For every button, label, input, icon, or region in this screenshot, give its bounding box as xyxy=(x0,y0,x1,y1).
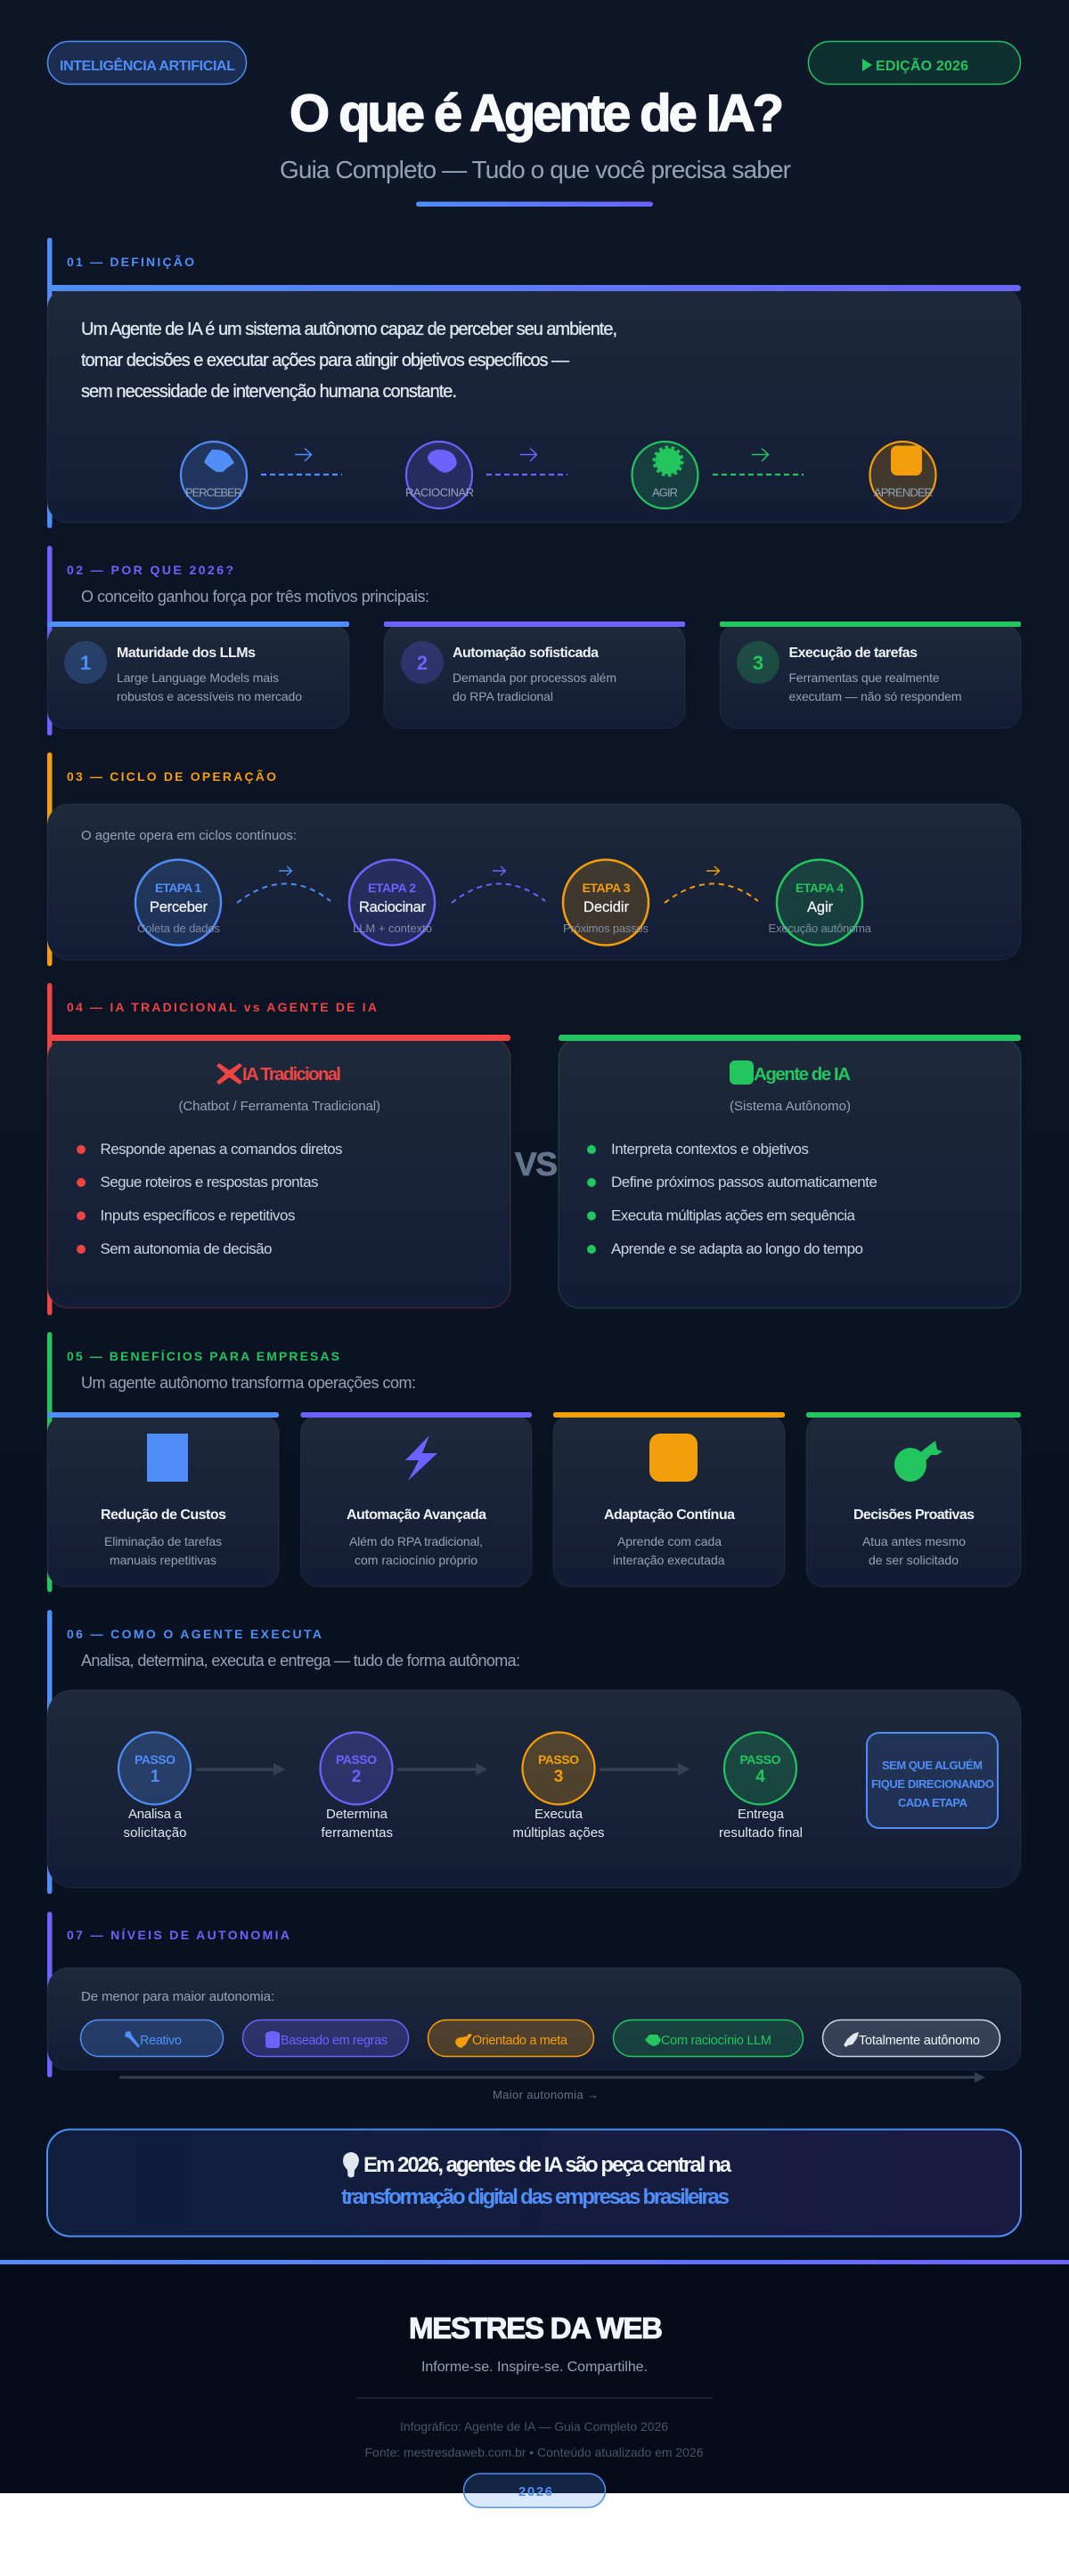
panel: ia tradicional: Segue roteiros e respostas prontas xyxy=(100,1174,319,1190)
pill: baseado em regras xyxy=(242,2019,408,2057)
step: passo 1: PASSO xyxy=(135,1752,175,1767)
step: passo 4: resultado final xyxy=(719,1825,803,1841)
arc arrow 2 xyxy=(452,866,545,903)
intro text: Um agente autônomo transforma operações com: xyxy=(81,1374,416,1392)
step 3: decidir: Próximos passos xyxy=(563,922,649,935)
arrow connector 2 xyxy=(486,449,567,475)
section label: 03 — CICLO DE OPERAÇÃO xyxy=(67,768,276,784)
step 2: raciocinar: Raciocinar xyxy=(359,899,426,915)
step 3: decidir: Decidir xyxy=(583,899,629,915)
card: maturidade dos LLMs xyxy=(47,622,349,728)
step: passo 4: 4 xyxy=(755,1767,765,1786)
section 02: por que 2026 xyxy=(47,546,1021,735)
credits line 1: Infográfico: Agente de IA — Guia Completo 2026 xyxy=(400,2419,668,2434)
step 3: decidir: ETAPA 3 xyxy=(583,881,631,895)
node: aprender: APRENDER xyxy=(874,486,933,499)
brand name: MESTRES DA WEB xyxy=(409,2312,663,2344)
card: automação avançada: Além do RPA tradicional, xyxy=(349,1534,483,1548)
badge: edição 2026: EDIÇÃO 2026 xyxy=(876,56,968,74)
node: aprender xyxy=(869,442,935,508)
step: passo 3 xyxy=(513,1733,604,1841)
callout: sem que alguém fique direcionando: CADA ETAPA xyxy=(898,1796,968,1809)
panel: agente de ia: Define próximos passos automaticamente xyxy=(611,1174,877,1190)
pill: baseado em regras: Baseado em regras xyxy=(281,2034,388,2048)
panel: agente de ia: Interpreta contextos e objetivos xyxy=(611,1141,809,1158)
vs label: VS xyxy=(515,1146,558,1182)
step: passo 2: Determina xyxy=(326,1807,388,1822)
title underline xyxy=(416,201,653,207)
card: decisões proativas: de ser solicitado xyxy=(869,1553,959,1567)
section label: 01 — DEFINIÇÃO xyxy=(67,254,194,269)
icon: light bulb xyxy=(343,2152,359,2178)
step 2: raciocinar xyxy=(349,860,435,946)
call to action banner xyxy=(47,2130,1021,2237)
intro text: O agente opera em ciclos contínuos: xyxy=(81,828,297,843)
panel: agente de ia: Agente de IA xyxy=(754,1064,851,1085)
step 1: perceber xyxy=(135,860,221,946)
panel: agente de ia: (Sistema Autônomo) xyxy=(730,1099,851,1114)
banner text line 1: Em 2026, agentes de IA são peça central na xyxy=(363,2153,732,2177)
badge: inteligência artificial xyxy=(48,41,246,84)
step: passo 1 xyxy=(118,1733,191,1841)
card: execução de tarefas: Execução de tarefas xyxy=(789,646,918,661)
step: passo 1: Analisa a xyxy=(128,1807,183,1822)
pill: com raciocínio LLM xyxy=(613,2019,804,2057)
section 06: como o agente executa xyxy=(47,1610,1021,1894)
panel: ia tradicional: IA Tradicional xyxy=(242,1064,341,1085)
step: passo 2 xyxy=(321,1733,393,1841)
card: automação sofisticada: Automação sofisticada xyxy=(453,646,599,661)
card: automação avançada: com raciocínio próprio xyxy=(355,1553,477,1567)
card: redução de custos: manuais repetitivas xyxy=(110,1553,216,1567)
intro text: O conceito ganhou força por três motivos principais: xyxy=(81,588,429,605)
banner text line 2: transformação digital das empresas brasileiras xyxy=(341,2185,730,2209)
step 4: agir: Agir xyxy=(807,899,834,915)
step: passo 2: 2 xyxy=(352,1767,361,1786)
step: passo 2: PASSO xyxy=(336,1752,377,1767)
node: perceber: PERCEBER xyxy=(185,486,242,499)
header xyxy=(48,41,1021,207)
section label: 05 — BENEFÍCIOS PARA EMPRESAS xyxy=(67,1349,339,1363)
arrow xyxy=(397,1763,487,1776)
section 01: definição xyxy=(47,238,1021,528)
section label: 04 — IA TRADICIONAL vs AGENTE DE IA xyxy=(67,1000,377,1014)
pill: totalmente autônomo xyxy=(823,2019,1000,2057)
panel: agente de ia xyxy=(559,1035,1021,1308)
card: automação sofisticada: Demanda por processos além xyxy=(453,670,616,685)
pill: com raciocínio LLM: Com raciocínio LLM xyxy=(661,2034,771,2048)
year badge xyxy=(463,2474,606,2507)
card: maturidade dos LLMs: robustos e acessíveis no mercado xyxy=(117,689,302,703)
step: passo 2: ferramentas xyxy=(321,1825,393,1841)
step: passo 4: PASSO xyxy=(739,1752,781,1767)
arrow xyxy=(600,1763,690,1776)
step: passo 4 xyxy=(719,1733,803,1841)
panel: ia tradicional xyxy=(47,1035,510,1308)
definition text: tomar decisões e executar ações para atingir objetivos específicos — xyxy=(81,351,569,370)
card: maturidade dos LLMs: Large Language Models mais xyxy=(117,670,279,685)
panel: ia tradicional: (Chatbot / Ferramenta Tradicional) xyxy=(178,1099,380,1114)
arc arrow 3 xyxy=(665,866,758,903)
card: automação sofisticada: do RPA tradicional xyxy=(453,689,553,703)
step 4: agir xyxy=(768,860,872,946)
card: adaptação contínua: Adaptação Contínua xyxy=(604,1507,735,1523)
panel: agente de ia: Aprende e se adapta ao longo do tempo xyxy=(611,1240,863,1257)
card: execução de tarefas xyxy=(720,622,1021,728)
panel: ia tradicional: Sem autonomia de decisão xyxy=(100,1240,273,1257)
step: passo 1: 1 xyxy=(151,1767,160,1786)
card: automação avançada: Automação Avançada xyxy=(347,1507,486,1523)
step: passo 3: Executa xyxy=(534,1807,583,1822)
card: redução de custos: Eliminação de tarefas xyxy=(104,1534,222,1548)
definition text: Um Agente de IA é um sistema autônomo capaz de perceber seu ambiente, xyxy=(81,320,617,339)
definition text xyxy=(81,320,617,402)
footer xyxy=(0,2260,1069,2507)
section 03: ciclo de operação xyxy=(47,752,1021,966)
badge: inteligência artificial: INTELIGÊNCIA ARTIFICIAL xyxy=(60,57,235,74)
section 05: benefícios xyxy=(47,1332,1021,1592)
step: passo 4: Entrega xyxy=(738,1807,785,1822)
card: adaptação contínua: interação executada xyxy=(613,1553,725,1567)
card: adaptação contínua xyxy=(553,1412,785,1587)
card: execução de tarefas: Ferramentas que realmente xyxy=(789,670,940,685)
section label: 06 — COMO O AGENTE EXECUTA xyxy=(67,1627,322,1641)
step 1: perceber: Perceber xyxy=(150,899,208,915)
arrow xyxy=(196,1763,285,1776)
step 4: agir: ETAPA 4 xyxy=(796,881,844,895)
arrow connector 3 xyxy=(713,449,804,475)
autonomy axis arrow xyxy=(119,2072,985,2083)
card: redução de custos xyxy=(47,1412,279,1587)
step 2: raciocinar: ETAPA 2 xyxy=(368,881,416,895)
card: redução de custos: Redução de Custos xyxy=(101,1507,226,1523)
pill: orientado a meta: Orientado a meta xyxy=(472,2034,568,2048)
pill: orientado a meta xyxy=(428,2019,593,2057)
year badge: 2026 xyxy=(518,2484,552,2499)
panel: levels xyxy=(47,1968,1021,2070)
card: execução de tarefas: executam — não só respondem xyxy=(789,689,962,703)
card: automação sofisticada xyxy=(384,622,685,728)
panel: cycle xyxy=(47,804,1021,960)
step 1: perceber: Coleta de dados xyxy=(137,922,221,935)
node: agir: AGIR xyxy=(652,486,678,499)
node: raciocinar: RACIOCINAR xyxy=(405,486,474,499)
card: maturidade dos LLMs: 1 xyxy=(80,652,91,674)
card: decisões proativas xyxy=(806,1412,1021,1587)
panel: definition xyxy=(47,288,1021,523)
card: decisões proativas: Atua antes mesmo xyxy=(862,1534,966,1548)
section label: 02 — POR QUE 2026? xyxy=(67,563,233,577)
node: raciocinar xyxy=(405,442,474,508)
callout: sem que alguém fique direcionando xyxy=(867,1733,998,1828)
pill: reativo: Reativo xyxy=(140,2034,182,2048)
step 3: decidir xyxy=(563,860,649,946)
pill: reativo xyxy=(80,2019,223,2057)
card: maturidade dos LLMs: Maturidade dos LLMs xyxy=(117,646,256,661)
section 07: níveis de autonomia xyxy=(47,1912,1021,2077)
callout: sem que alguém fique direcionando: SEM QUE ALGUÉM xyxy=(882,1759,983,1772)
panel: execution flow xyxy=(47,1690,1021,1888)
intro text: Analisa, determina, executa e entrega — tudo de forma autônoma: xyxy=(81,1652,520,1670)
badge: edição 2026 xyxy=(809,41,1021,84)
step: passo 3: múltiplas ações xyxy=(513,1825,604,1841)
step: passo 3: PASSO xyxy=(538,1752,579,1767)
card: automação avançada xyxy=(301,1412,532,1587)
card: adaptação contínua: Aprende com cada xyxy=(617,1534,722,1548)
panel: ia tradicional: Inputs específicos e repetitivos xyxy=(100,1207,296,1223)
callout: sem que alguém fique direcionando: FIQUE DIRECIONANDO xyxy=(871,1777,994,1791)
definition text: sem necessidade de intervenção humana constante. xyxy=(81,382,457,402)
pill: totalmente autônomo: Totalmente autônomo xyxy=(859,2034,980,2048)
panel: ia tradicional: Responde apenas a comandos diretos xyxy=(100,1141,342,1158)
card: automação sofisticada: 2 xyxy=(417,652,428,674)
intro text: De menor para maior autonomia: xyxy=(81,1989,274,2004)
credits line 2: Fonte: mestresdaweb.com.br • Conteúdo atualizado em 2026 xyxy=(365,2445,704,2459)
axis caption: Maior autonomia → xyxy=(493,2088,599,2101)
node: perceber xyxy=(181,442,247,508)
step 4: agir: Execução autônoma xyxy=(768,922,872,935)
step: passo 3: 3 xyxy=(554,1767,563,1786)
arc arrow 1 xyxy=(237,866,330,903)
section label: 07 — NÍVEIS DE AUTONOMIA xyxy=(67,1928,290,1942)
step 2: raciocinar: LLM + contexto xyxy=(353,922,432,935)
card: decisões proativas: Decisões Proativas xyxy=(853,1507,975,1523)
title: O que é Agente de IA? xyxy=(290,85,784,142)
arrow connector 1 xyxy=(261,449,342,475)
section 04: tradicional vs agente xyxy=(47,983,1021,1315)
step: passo 1: solicitação xyxy=(123,1825,187,1841)
card: execução de tarefas: 3 xyxy=(753,652,763,674)
panel: agente de ia: Executa múltiplas ações em sequência xyxy=(611,1207,856,1223)
tagline: Informe-se. Inspire-se. Compartilhe. xyxy=(421,2360,648,2375)
step 1: perceber: ETAPA 1 xyxy=(155,881,201,895)
subtitle: Guia Completo — Tudo o que você precisa saber xyxy=(280,156,791,183)
node: agir xyxy=(632,442,698,508)
